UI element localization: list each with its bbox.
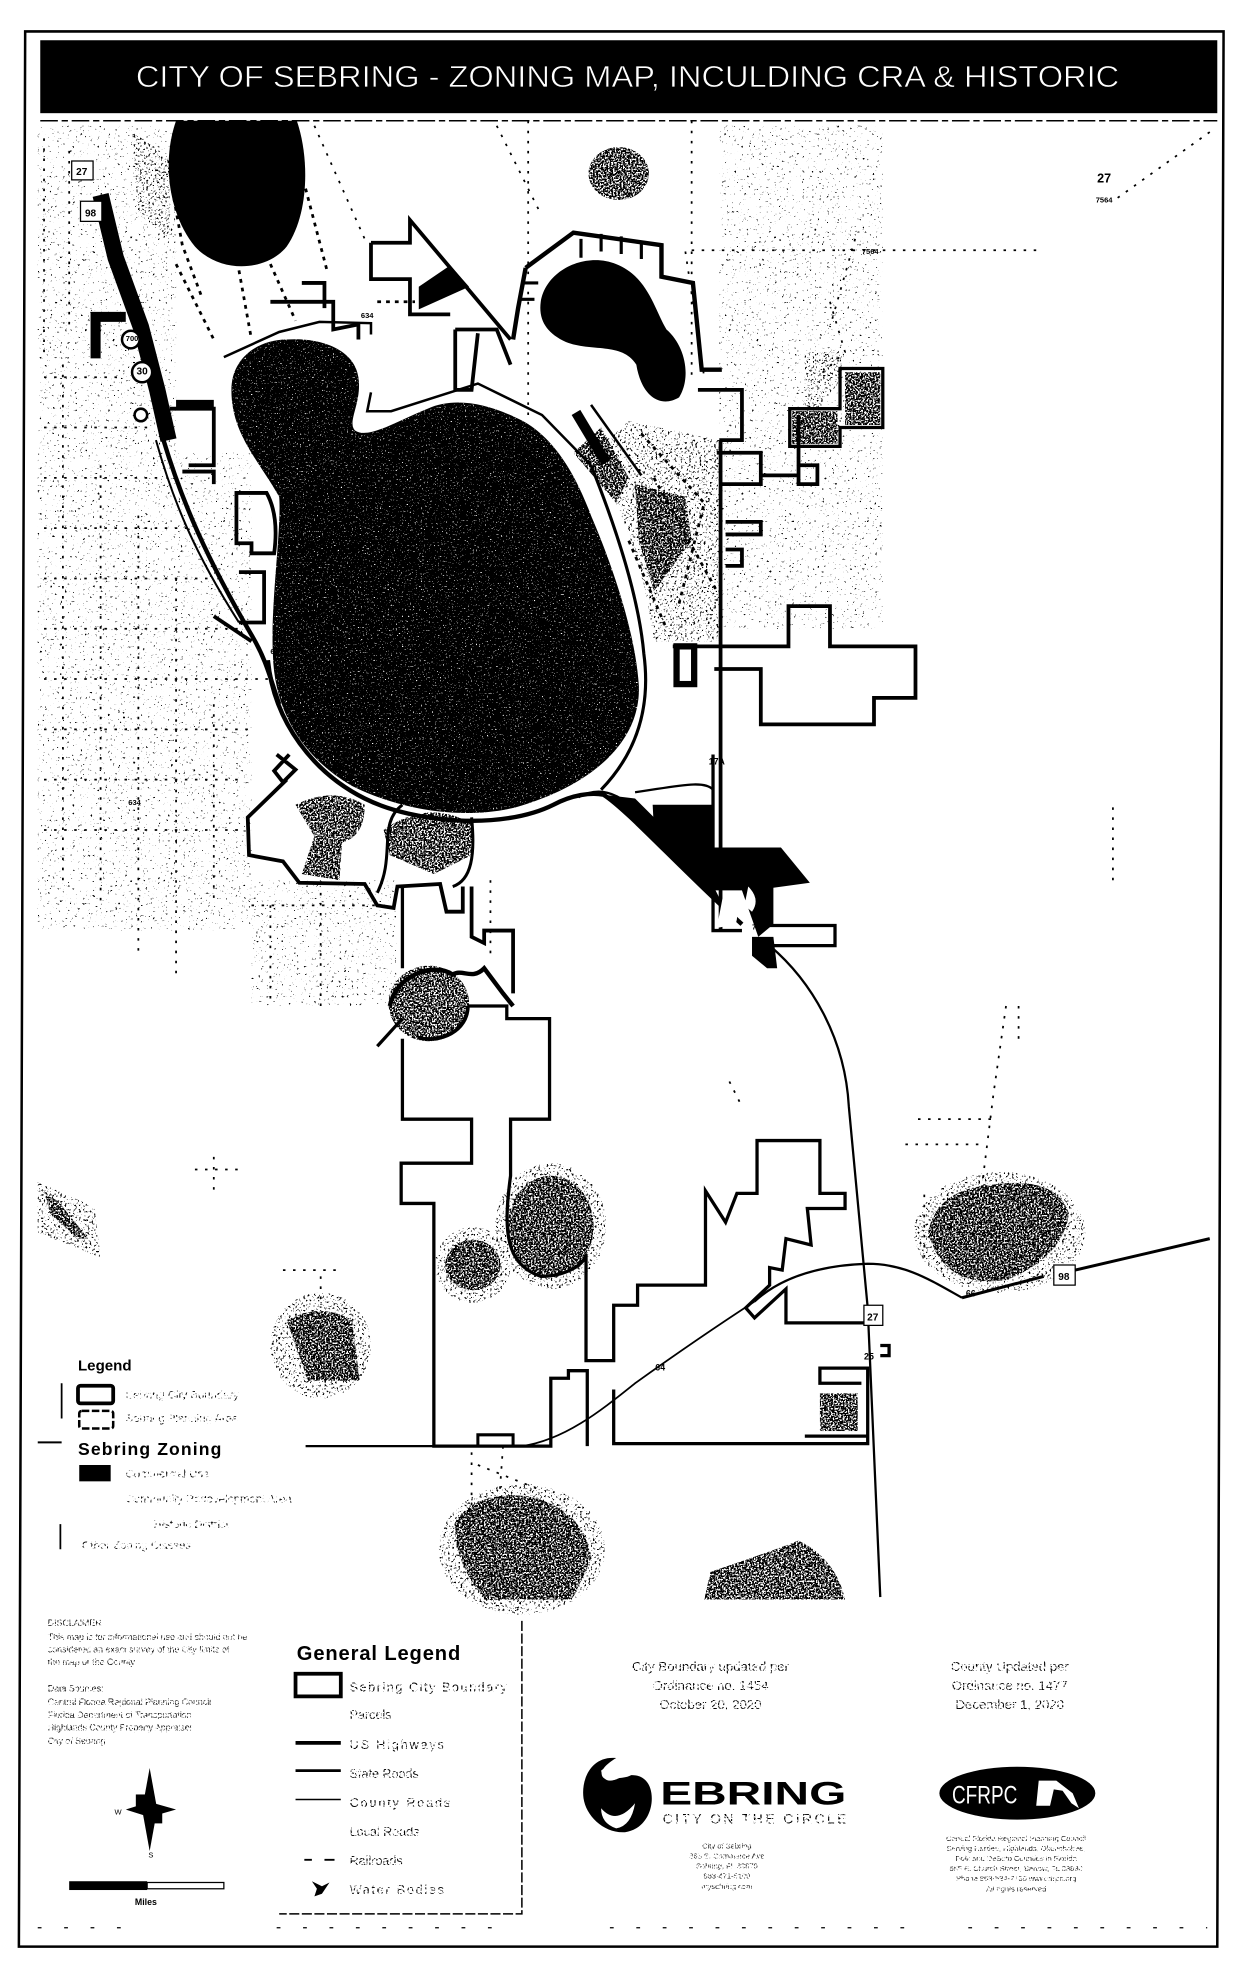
road shields: 27 [1097,171,1111,185]
legend: map: Sebring City Boundary [126,1389,239,1401]
compass rose: W [114,1808,122,1817]
disclaimer and data source text: the map or the County [48,1657,135,1667]
title banner: CITY OF SEBRING - ZONING MAP, INCULDING CRA & HISTORIC [136,59,1119,94]
disclaimer and data source text: Highlands County Property Appraiser [48,1722,193,1732]
boundary update notes: December 1, 2020 [956,1697,1064,1712]
general legend panel: Sebring City Boundary [350,1680,508,1694]
boundary update notes [632,1659,1069,1712]
general legend panel: US Highways [350,1738,444,1752]
legend: map: Community Redevelopment Area [126,1494,292,1506]
road shields: 17A [709,757,726,767]
disclaimer and data source text: considered an exact survey of the City limits of [48,1644,230,1654]
boundary update notes: October 20, 2020 [660,1697,761,1712]
disclaimer and data source text [48,1618,247,1746]
Sebring logo: mysebring.com [701,1882,752,1891]
Sebring logo: City of Sebring [702,1842,752,1851]
CFRPC logo: Serving Hardee, Highlands, Okeechobee, [947,1844,1086,1853]
boundary update notes: County Updated per [951,1659,1069,1674]
disclaimer and data source text: City of Sebring [48,1736,106,1746]
general legend panel: Parcels [350,1708,391,1722]
road shields: 634 [270,647,284,656]
major highway corridor [91,195,279,704]
disclaimer and data source text: Florida Department of Transportation [48,1710,192,1720]
CFRPC logo: 555 E. Church Street, Bartow, FL 33830 [949,1864,1083,1873]
main lake [231,339,639,813]
CFRPC logo [939,1767,1095,1893]
title banner [40,40,1217,113]
road shields: 98 [85,208,97,219]
zoning map [38,121,1217,1615]
road shields: 700 [752,922,765,931]
Sebring logo: EBRING [660,1775,846,1812]
CFRPC logo: Phone 863-534-7130 www.cfrpc.org [956,1874,1076,1883]
general legend panel: County Roads [350,1796,450,1810]
CFRPC logo: CFRPC [952,1781,1017,1809]
highways [306,946,1210,1597]
Sebring logo [583,1758,846,1891]
disclaimer and data source text: This map is for informational use and should not be [48,1632,247,1642]
disclaimer and data source text: DISCLAIMER [48,1618,102,1628]
commercial zones [419,265,810,968]
city boundary [170,220,915,1446]
CFRPC logo: All rights reserved [986,1884,1046,1893]
legend: map: Sebring Zoning [78,1439,221,1459]
road shields: 27 [867,1312,879,1323]
north lake [169,121,305,266]
compass rose: S [148,1850,153,1859]
scale bar: Miles [135,1897,157,1907]
legend: map [38,1358,292,1552]
road shields: 30 [137,367,148,378]
disclaimer and data source text: Central Florida Regional Planning Council [48,1697,211,1707]
road shields [72,161,1113,1373]
general legend panel: Water Bodies [350,1883,444,1897]
general legend panel: Local Roads [350,1825,419,1839]
road shields: 700 [342,748,355,757]
road shields: 64 [655,1363,665,1373]
general legend panel [279,1621,522,1914]
legend: map: Other Zoning Classes [82,1540,191,1552]
general legend panel: Railroads [350,1854,403,1868]
Sebring logo: 863-471-5100 [703,1872,750,1881]
Sebring logo: Sebring, FL 33870 [696,1862,758,1871]
CFRPC logo: Central Florida Regional Planning Council [946,1834,1086,1843]
legend: map: Sebring Planning Area [126,1413,239,1425]
disclaimer and data source text: Data Sources: [48,1683,104,1693]
boundary update notes: Ordinance no. 1454 [653,1678,768,1693]
scale bar [69,1881,224,1907]
local road network [44,121,1210,1534]
northeast lake [540,260,686,401]
road shields: 27 [76,167,88,178]
speckled ponds [38,126,1085,1615]
boundary update notes: Ordinance no. 1477 [952,1678,1068,1693]
road shields: 98 [1058,1272,1070,1283]
CFRPC logo: Polk and DeSoto Counties in Florida [955,1854,1078,1863]
legend: map: Historic District [153,1519,230,1531]
general legend panel: General Legend [297,1643,460,1665]
general legend panel: State Roads [350,1767,419,1781]
road shields: 634 [361,311,374,320]
boundary update notes: City Boundary updated per [632,1659,790,1674]
Sebring logo: CITY ON THE CIRCLE [663,1810,846,1826]
road shields: 7564 [1096,195,1113,204]
road shields: 25 [864,1351,874,1361]
Sebring logo: 368 S. Commerce Ave [689,1852,764,1861]
legend symbols [38,1383,113,1549]
legend: map: Legend [78,1358,132,1375]
legend: map: Commercial Use [126,1469,209,1481]
road shields: 7564 [862,247,879,256]
compass rose [114,1768,176,1859]
road shields: 700 [126,334,138,343]
road shields: 634 [128,798,142,807]
road shields: 66 [966,1288,976,1298]
